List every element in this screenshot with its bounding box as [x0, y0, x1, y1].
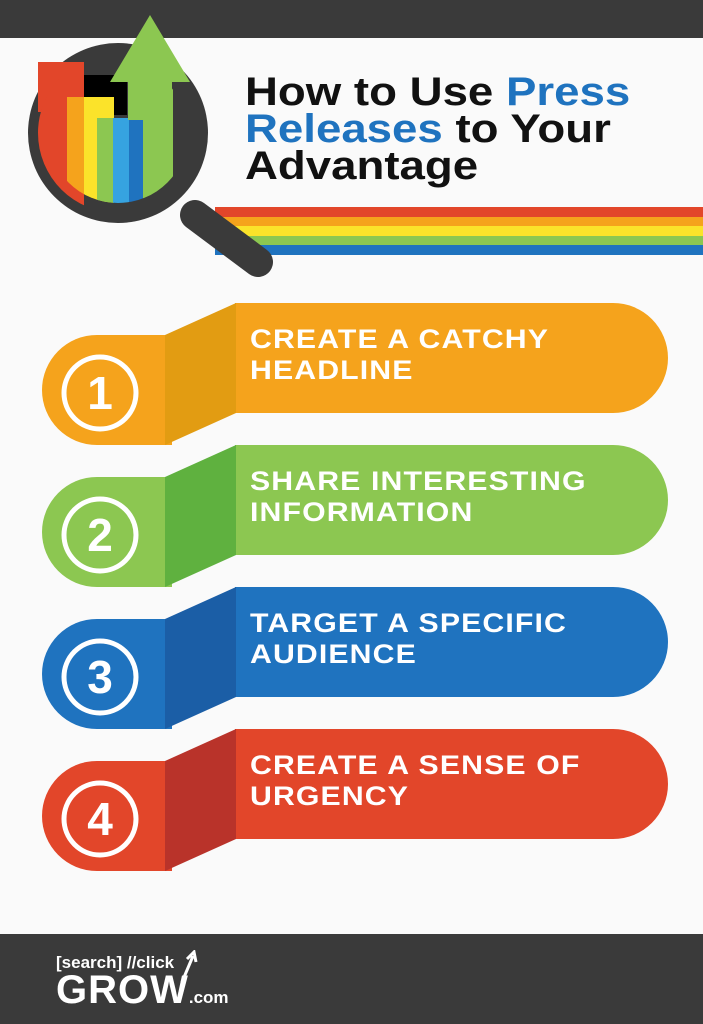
- step 4: [42, 729, 668, 871]
- step 3: AUDIENCE: [250, 639, 417, 669]
- footer: [0, 934, 703, 1024]
- title: How to Use Press: [245, 70, 630, 114]
- step 1: HEADLINE: [250, 355, 414, 385]
- title: [245, 70, 630, 188]
- step 3: [42, 587, 668, 729]
- step 1: [42, 303, 668, 445]
- title: Releases to Your: [245, 107, 611, 151]
- icon: magnifier with bar chart: [28, 15, 273, 277]
- step 2: INFORMATION: [250, 497, 473, 527]
- step 4: URGENCY: [250, 781, 409, 811]
- step 4: 4: [87, 793, 113, 845]
- step 2: SHARE INTERESTING: [250, 466, 587, 496]
- step 2: 2: [87, 509, 113, 561]
- title: Advantage: [245, 144, 478, 188]
- step 1: CREATE A CATCHY: [250, 324, 549, 354]
- logo: GROW.com: [56, 968, 229, 1012]
- step 1: 1: [87, 367, 113, 419]
- step 2: [42, 445, 668, 587]
- step 3: TARGET A SPECIFIC: [250, 608, 567, 638]
- top bar: [0, 0, 703, 38]
- step 3: 3: [87, 651, 113, 703]
- logo: [search] //click: [56, 953, 174, 972]
- step 4: CREATE A SENSE OF: [250, 750, 580, 780]
- rainbow stripes: [215, 207, 703, 255]
